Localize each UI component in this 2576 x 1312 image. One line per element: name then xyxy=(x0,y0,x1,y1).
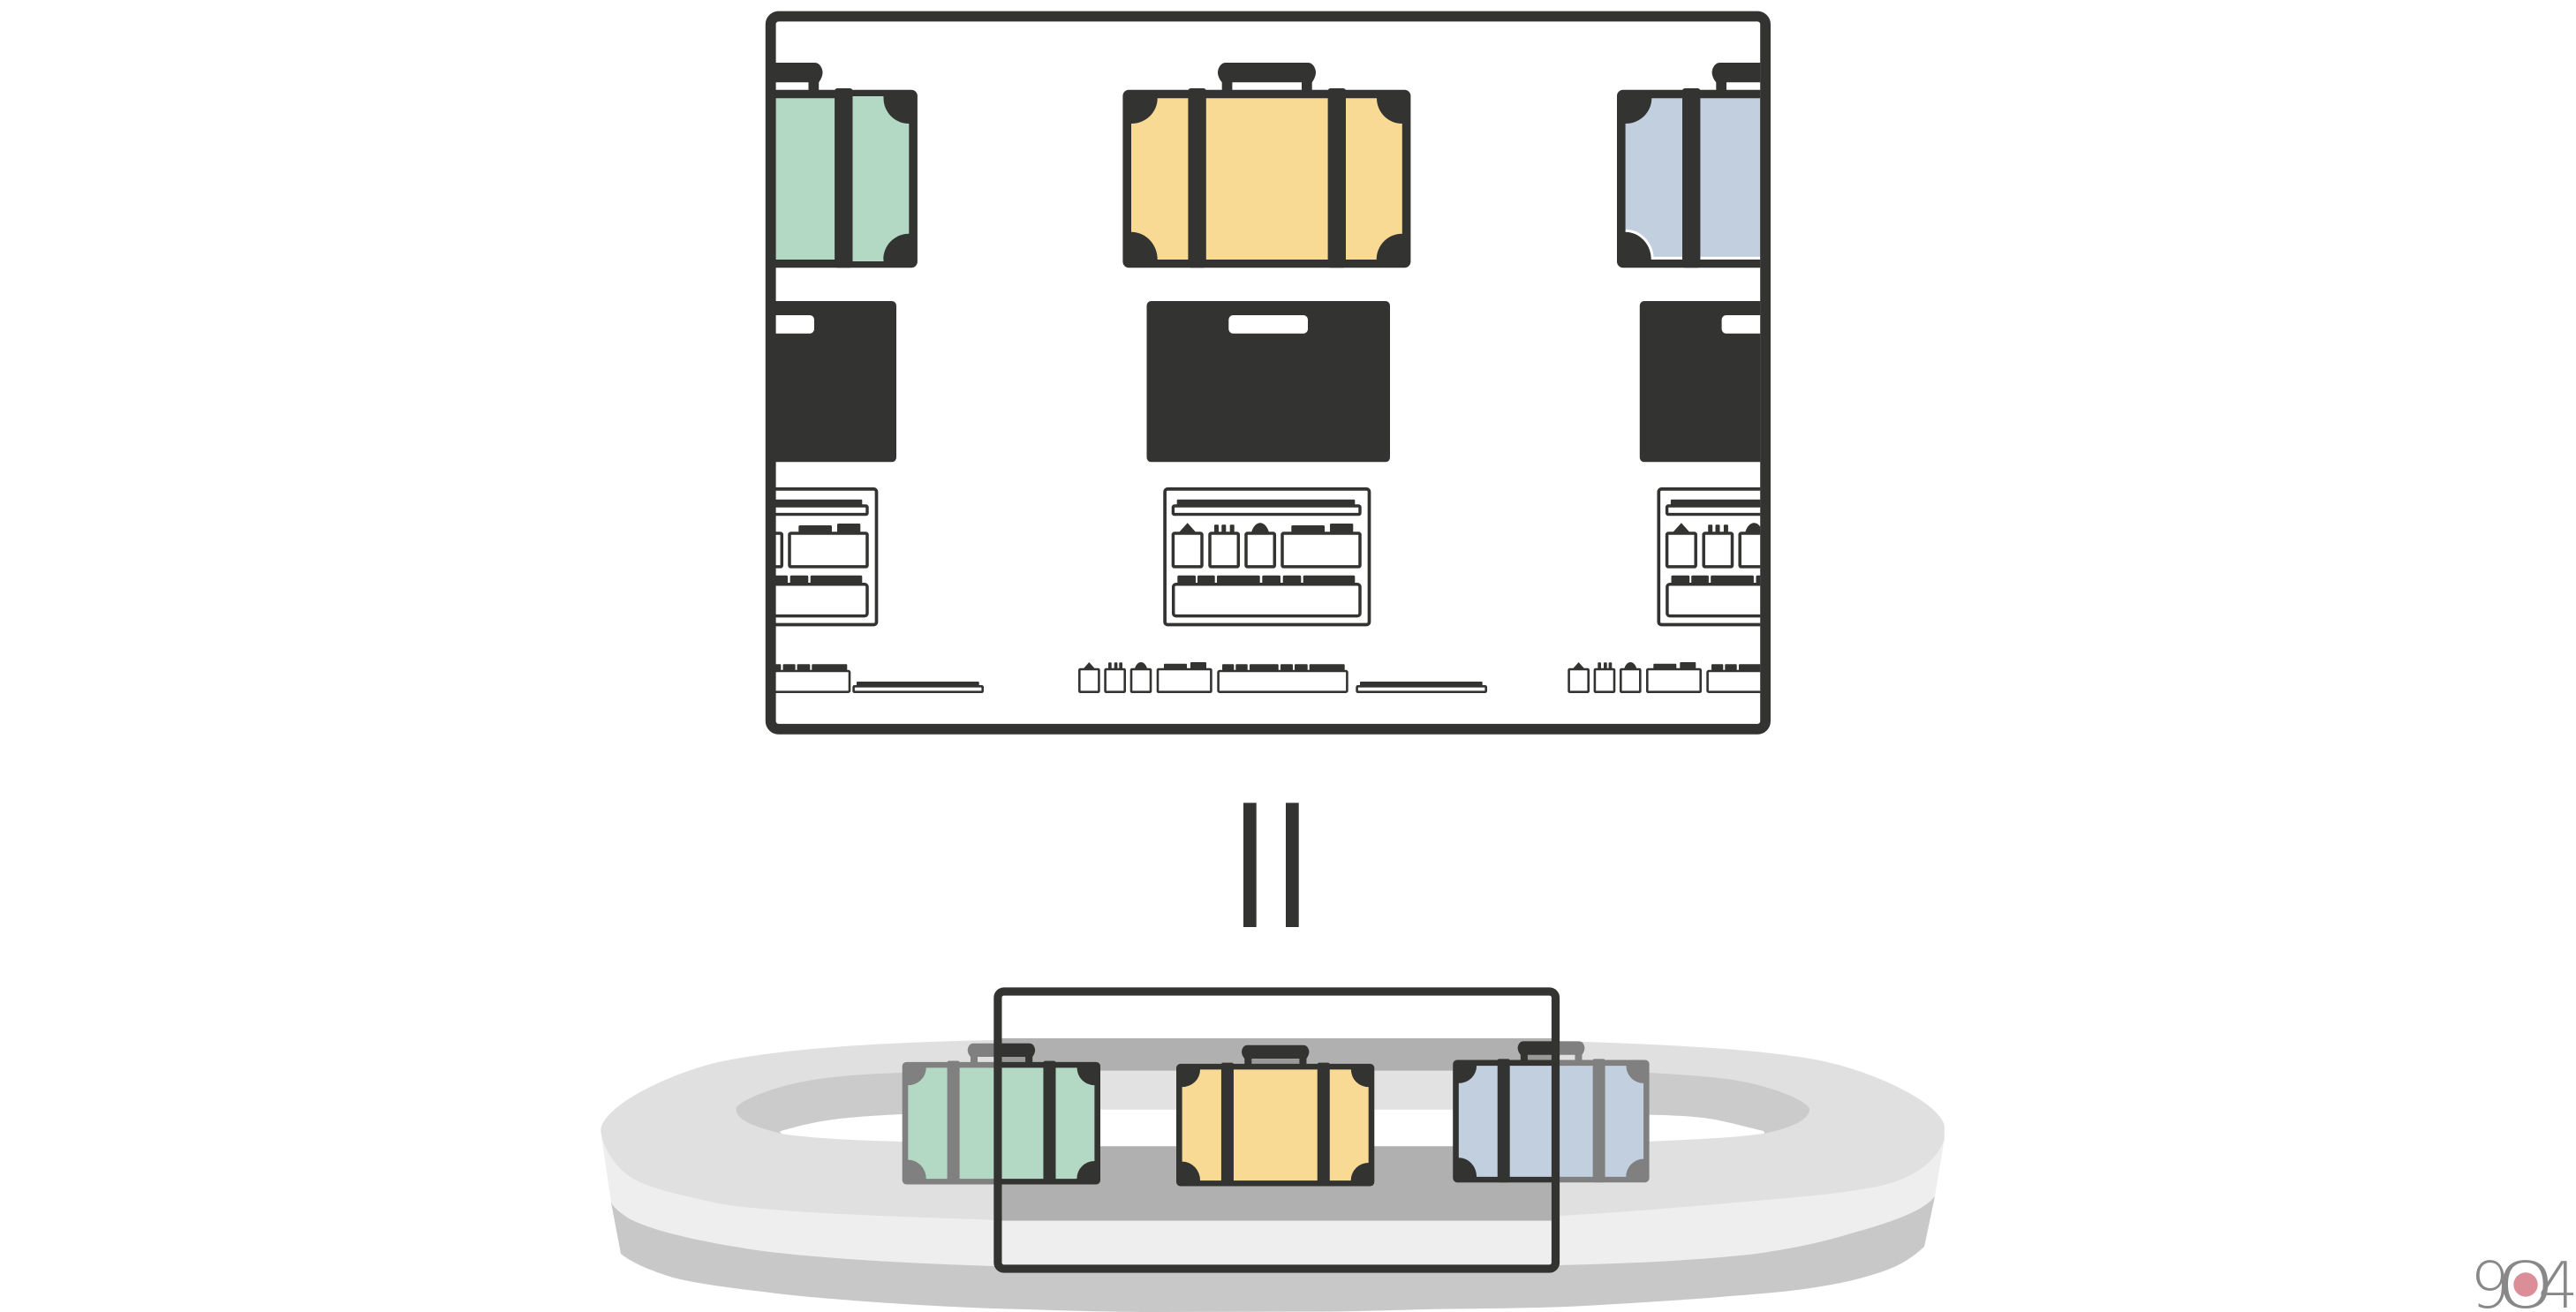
suitcase: blue, outer view xyxy=(1617,63,1761,268)
equals sign xyxy=(1243,803,1299,927)
column of clipped contents xyxy=(630,63,1905,692)
suitcase on belt: blue xyxy=(1453,1041,1650,1182)
frame: lower viewport xyxy=(998,992,1556,1269)
panel: enlarged view of luggage and contents xyxy=(765,11,1771,735)
case shell: centre xyxy=(1146,301,1390,462)
carousel base xyxy=(611,1196,1935,1312)
green suitcase: panel and straps xyxy=(908,1061,1094,1185)
case shell: left xyxy=(775,301,896,463)
carousel inner wall xyxy=(736,1073,1809,1134)
suitcase: yellow, outer view xyxy=(1122,63,1410,268)
packed contents: centre xyxy=(1165,489,1369,625)
case shell: right xyxy=(1639,301,1761,463)
carousel centre opening xyxy=(780,1114,1764,1142)
unpacked items row: left xyxy=(775,664,984,693)
green suitcase: dark half inside viewport xyxy=(1001,1044,1100,1185)
frame: upper viewport xyxy=(771,16,1765,729)
blue suitcase: panel and straps xyxy=(1459,1059,1643,1182)
blue suitcase: dark half inside viewport xyxy=(1453,1041,1552,1183)
carousel rim xyxy=(601,1132,1945,1266)
suitcase: green, outer view xyxy=(775,63,918,268)
suitcase on belt: green xyxy=(903,1044,1100,1185)
unpacked items row: centre xyxy=(1079,662,1486,692)
carousel top surface xyxy=(601,1040,1945,1220)
suitcase on belt: yellow xyxy=(1176,1045,1374,1187)
conveyor carousel xyxy=(601,1040,1945,1312)
viewport contents: highlighted belt bands xyxy=(1001,1038,1552,1221)
unpacked items row: right xyxy=(1568,662,1761,693)
logo: 904 xyxy=(2470,1248,2576,1312)
packed contents: left xyxy=(775,487,878,627)
packed contents: right xyxy=(1657,487,1761,627)
